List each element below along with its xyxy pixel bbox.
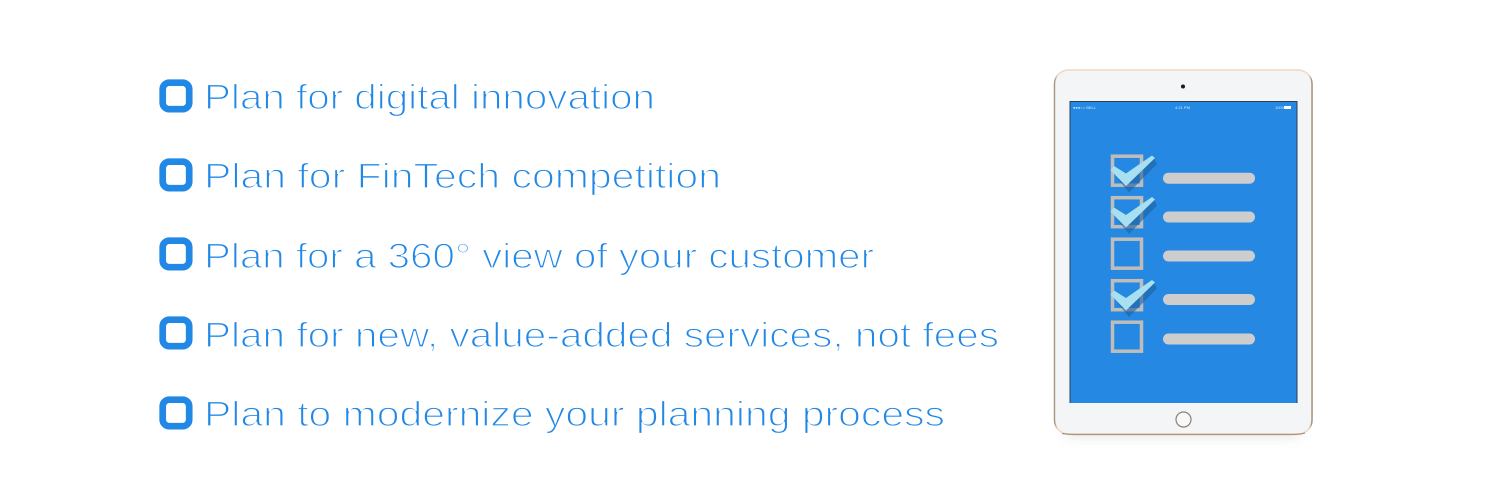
checklist items	[163, 78, 999, 434]
screen	[1070, 102, 1297, 403]
row 5	[1112, 322, 1255, 351]
tablet body	[1054, 70, 1312, 434]
status bar: ●●●○○ BELL	[1073, 105, 1097, 110]
tablet illustration	[1054, 70, 1312, 436]
item 2: FinTech competition: Plan for FinTech competition	[204, 157, 721, 196]
row 4	[1110, 280, 1255, 317]
status bar	[1073, 105, 1291, 110]
item 5: modernize planning: Plan to modernize your planning process	[204, 395, 945, 434]
tablet shadow	[1066, 428, 1300, 436]
row 2	[1110, 197, 1255, 234]
item 3: 360 view of customer: Plan for a 360° view of your customer	[204, 237, 874, 276]
item 4: value-added services: Plan for new, value-added services, not fees	[204, 316, 999, 355]
item 1: digital innovation: Plan for digital innovation	[204, 78, 655, 117]
status bar: 4:21 PM	[1175, 105, 1190, 110]
tablet bottom edge	[1062, 433, 1305, 434]
home button	[1176, 412, 1191, 427]
camera	[1181, 84, 1185, 88]
screen edge	[1070, 102, 1297, 403]
status bar: 100%	[1275, 105, 1286, 110]
row 1	[1110, 156, 1255, 192]
row 3	[1112, 239, 1255, 268]
